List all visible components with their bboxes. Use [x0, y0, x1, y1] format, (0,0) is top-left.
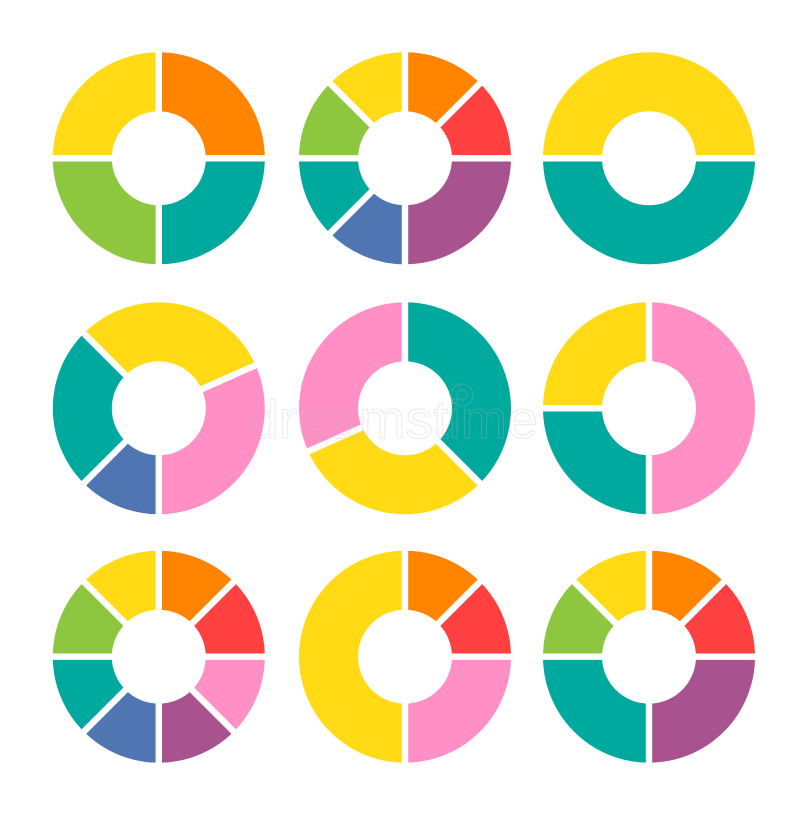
segment: yellow — [299, 551, 405, 763]
segment: red — [405, 83, 511, 158]
segment: yellow — [543, 302, 649, 408]
segment: red — [649, 582, 755, 657]
donut: row 1 column 1, four segments — [49, 48, 269, 268]
donut: row 2 column 3, three segments — [539, 298, 755, 518]
segment: teal — [543, 158, 755, 264]
segment: green — [53, 582, 159, 657]
segment: yellow — [330, 52, 405, 158]
segment: green — [299, 83, 405, 158]
segment: teal — [299, 158, 405, 233]
segment: pink — [405, 657, 511, 763]
segment: orange — [649, 551, 724, 657]
segment: teal — [543, 408, 649, 514]
segment: teal — [159, 158, 265, 264]
segment: yellow — [308, 408, 480, 514]
donut: row 3 column 2, four segments — [299, 547, 515, 767]
segment: yellow — [574, 551, 649, 657]
donut: row 2 column 1, four segments — [53, 302, 265, 518]
segment: purple — [159, 657, 234, 763]
segment: teal — [53, 657, 159, 732]
donut: row 2 column 2, three segments — [299, 298, 511, 514]
donut: row 3 column 1, eight segments — [49, 547, 269, 767]
segment: pink — [159, 657, 265, 732]
segment: teal — [543, 657, 649, 763]
segment: purple — [649, 657, 755, 763]
watermark: dreamstime — [248, 390, 538, 450]
segment: orange — [159, 551, 234, 657]
donut: row 3 column 3, six segments — [539, 547, 759, 767]
segment: red — [159, 582, 265, 657]
donut: row 1 column 2, seven segments — [295, 48, 515, 268]
segment: teal — [405, 302, 511, 483]
segment: green — [543, 582, 649, 657]
segment: teal — [53, 333, 159, 483]
donut: row 1 column 3, two segments — [539, 52, 759, 264]
segment: red — [405, 582, 511, 657]
segment: pink — [649, 302, 755, 514]
segment: yellow — [53, 52, 159, 158]
segment: purple — [405, 158, 511, 264]
segment: orange — [405, 551, 480, 657]
segment: pink — [299, 302, 405, 451]
segment: blue — [84, 657, 159, 763]
segment: yellow — [84, 302, 256, 408]
segment: orange — [159, 52, 265, 158]
segment: orange — [405, 52, 480, 158]
segment: blue — [84, 408, 159, 514]
segment: yellow — [543, 52, 755, 158]
segment: yellow — [84, 551, 159, 657]
segment: green — [53, 158, 159, 264]
segment: blue — [330, 158, 405, 264]
segment: pink — [159, 365, 265, 514]
